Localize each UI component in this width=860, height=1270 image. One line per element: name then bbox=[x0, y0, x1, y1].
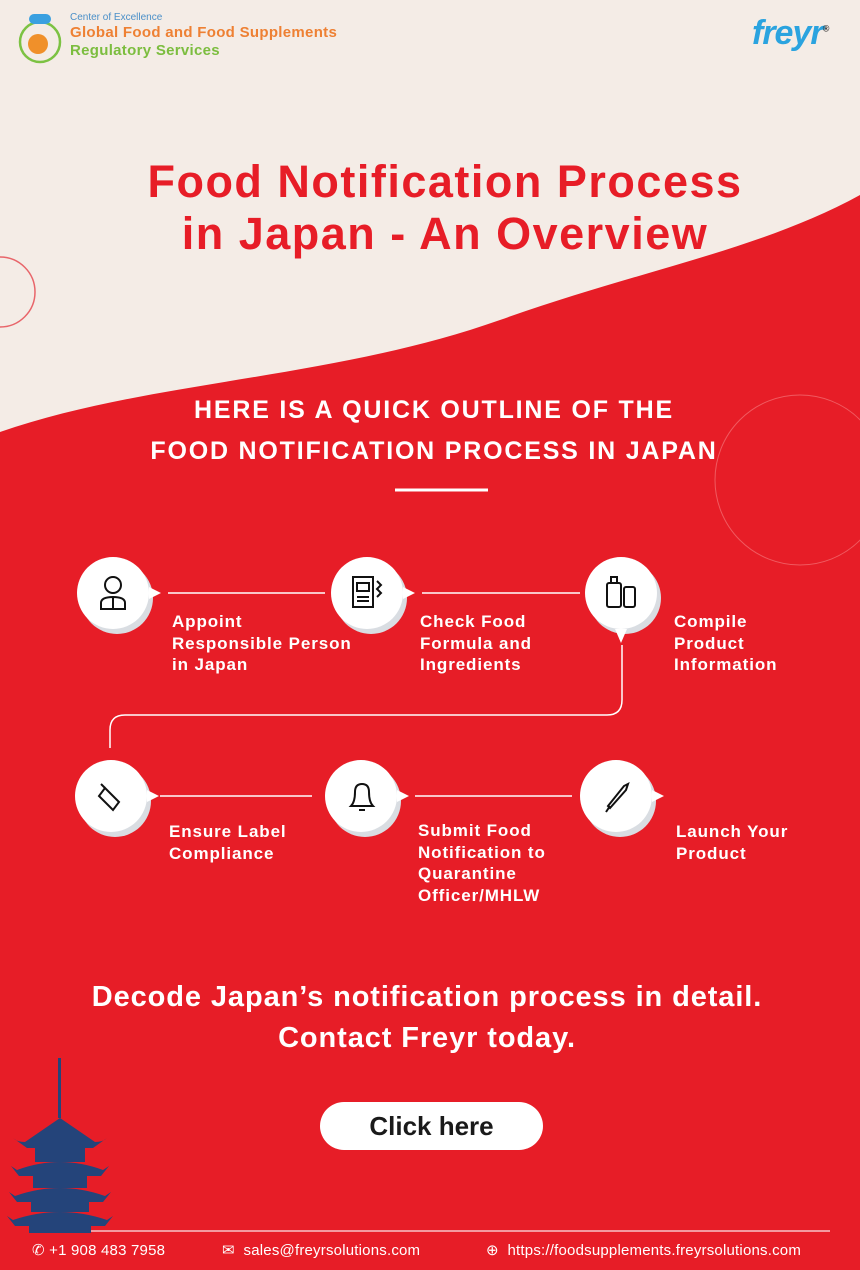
step 4: Ensure Label bbox=[169, 822, 287, 841]
title: in Japan - An Overview bbox=[182, 208, 708, 259]
logo: Center of Excellence bbox=[70, 12, 162, 23]
connectors bbox=[110, 593, 622, 796]
step 1: Responsible Person bbox=[172, 634, 352, 652]
footer: ⊕ https://foodsupplements.freyrsolutions.com bbox=[486, 1242, 801, 1259]
subtitle: HERE IS A QUICK OUTLINE OF THE bbox=[194, 396, 674, 424]
step 6: Launch Your bbox=[676, 822, 788, 841]
step 5: Quarantine bbox=[418, 864, 517, 883]
step 5: Notification to bbox=[418, 842, 546, 862]
subtitle: FOOD NOTIFICATION PROCESS IN JAPAN bbox=[150, 437, 718, 465]
step 4 bbox=[75, 760, 287, 862]
step 6: Product bbox=[676, 844, 747, 862]
footer bbox=[32, 1242, 801, 1259]
step 3: Information bbox=[674, 655, 777, 674]
step 3: Product bbox=[674, 634, 745, 652]
freyr logo: freyr® bbox=[752, 14, 828, 52]
step 1: Appoint bbox=[172, 612, 242, 631]
step 2 bbox=[331, 557, 532, 674]
step 5 bbox=[325, 760, 546, 904]
step 3 bbox=[585, 557, 777, 674]
step 2: Ingredients bbox=[420, 655, 522, 674]
cta text: Contact Freyr today. bbox=[278, 1022, 576, 1054]
step 2: Formula and bbox=[420, 634, 532, 652]
button: Click here bbox=[369, 1111, 494, 1141]
footer: ✆ +1 908 483 7958 bbox=[32, 1242, 165, 1259]
logo bbox=[18, 12, 337, 64]
button bbox=[320, 1102, 543, 1150]
step 5: Officer/MHLW bbox=[418, 886, 540, 904]
logo: Global Food and Food Supplements bbox=[70, 24, 337, 41]
step 2: Check Food bbox=[420, 612, 526, 631]
step 1: in Japan bbox=[172, 655, 248, 674]
logo: Regulatory Services bbox=[70, 42, 220, 59]
step 5: Submit Food bbox=[418, 821, 532, 840]
cta text: Decode Japan’s notification process in detail. bbox=[92, 981, 762, 1013]
pagoda bbox=[7, 1058, 113, 1233]
step 3: Compile bbox=[674, 612, 747, 631]
title: Food Notification Process bbox=[147, 156, 743, 207]
cta text bbox=[92, 981, 762, 1054]
step 4: Compliance bbox=[169, 844, 274, 862]
footer: ✉ sales@freyrsolutions.com bbox=[222, 1242, 420, 1259]
step 1 bbox=[77, 557, 352, 674]
subtitle bbox=[150, 396, 718, 465]
step 6 bbox=[580, 760, 788, 862]
title bbox=[147, 156, 743, 259]
